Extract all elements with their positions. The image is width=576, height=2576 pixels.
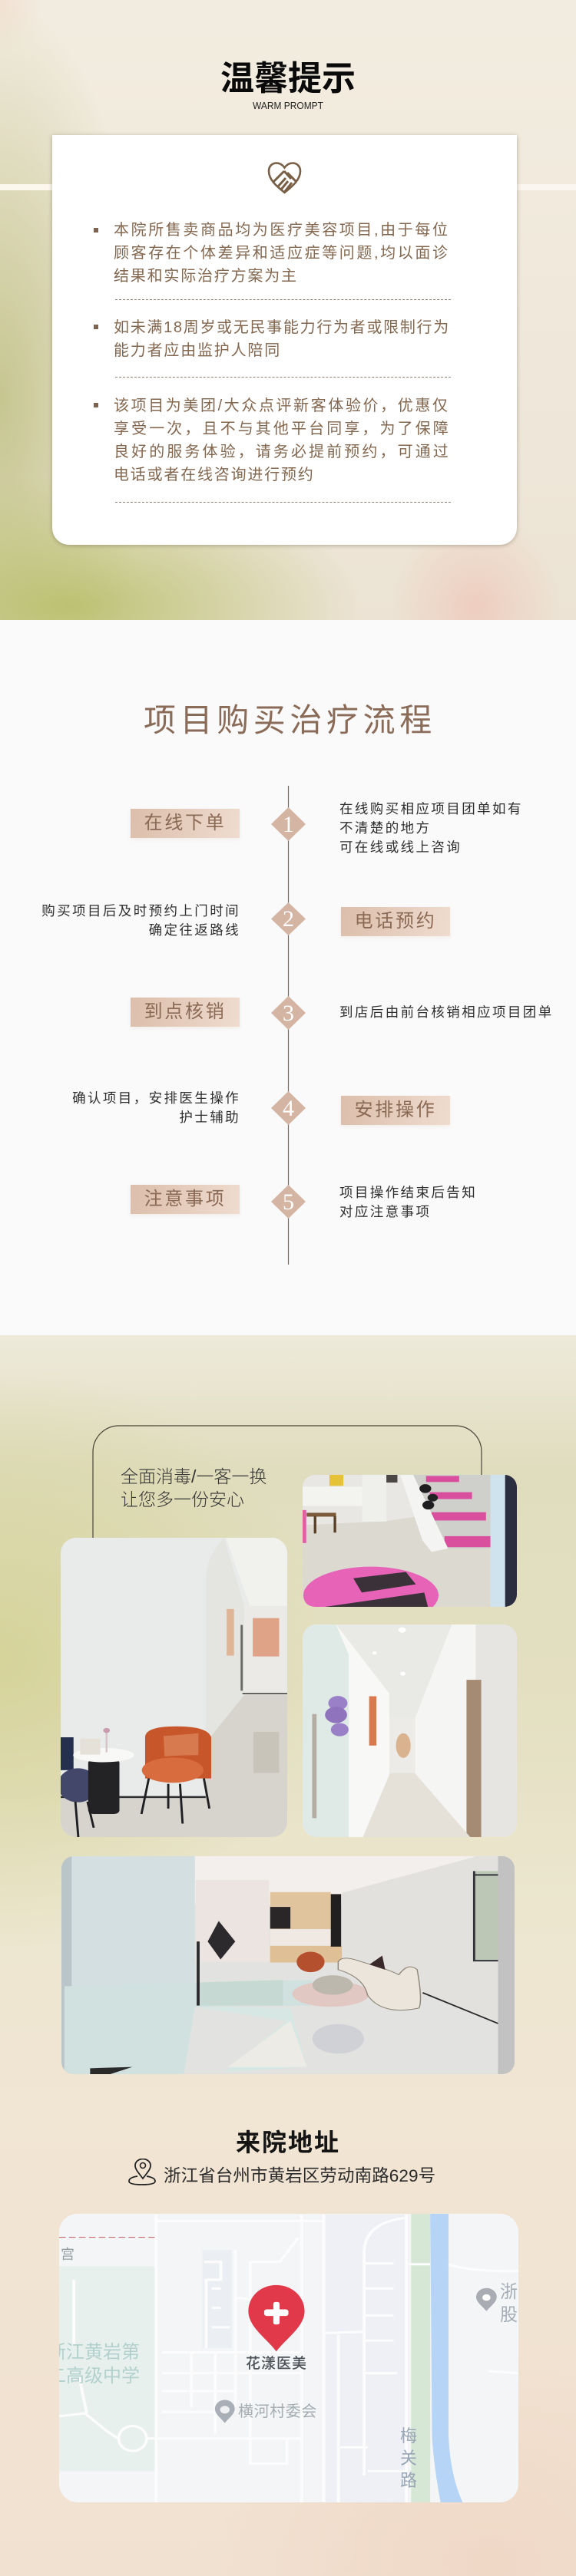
text lines: 该项目为美团/大众点评新客体验价，优惠仅 [114, 397, 450, 414]
heading: warm prompt [220, 60, 356, 111]
text lines: 电话或者在线咨询进行预约 [114, 467, 315, 483]
bullet [94, 325, 98, 329]
step 4 description: 护士辅助 [179, 1110, 240, 1125]
map label: right poi [500, 2281, 518, 2324]
map label: village committee: 横河村委会 [238, 2403, 317, 2420]
title: 温馨提示 [220, 60, 356, 97]
panel: warm prompt background [0, 0, 576, 620]
step 4 marker: 4 [283, 1096, 294, 1121]
text lines: 顾客存在个体差异和适应症等问题,均以面诊 [114, 245, 450, 262]
step 1 label [131, 809, 240, 838]
bullet [94, 403, 98, 407]
step 2 description: 确定往返路线 [149, 922, 240, 938]
hygiene caption [121, 1466, 266, 1509]
step 4 description [72, 1090, 240, 1125]
pin: village committee [215, 2400, 235, 2423]
text lines [114, 221, 450, 285]
text lines: 如未满18周岁或无民事能力行为者或限制行为 [114, 319, 450, 336]
text lines: 本院所售卖商品均为医疗美容项目,由于每位 [114, 222, 450, 239]
hygiene caption: 全面消毒/一客一换 [121, 1466, 266, 1486]
step 4 label [341, 1096, 450, 1125]
map label: palace: 宫 [61, 2247, 74, 2262]
map base [59, 2214, 497, 2502]
photo: corridor with orange chair [61, 1538, 287, 1837]
heading: hospital address: 来院地址 [236, 2129, 340, 2156]
step 5 marker [271, 1185, 306, 1219]
map label: road: 路 [400, 2471, 417, 2490]
panel: environment and address background [0, 1335, 576, 2576]
map label: road: 梅 [400, 2426, 417, 2446]
step 5 label [131, 1185, 240, 1214]
step 3 marker [271, 996, 306, 1030]
photo: lounge with sofa and glass stair rail [61, 1856, 515, 2074]
step 3 marker: 3 [283, 1001, 294, 1026]
step 1 description: 在线购买相应项目团单如有 [339, 801, 523, 816]
step 2 label: 电话预约 [355, 911, 436, 932]
map label: road: 关 [400, 2449, 417, 2468]
step 1 description: 不清楚的地方 [339, 820, 431, 836]
step 2 marker [271, 902, 306, 935]
step 1 description: 可在线或线上咨询 [339, 839, 462, 855]
tip 2 [94, 319, 450, 359]
subtitle: WARM PROMPT [253, 100, 323, 111]
text lines [114, 319, 450, 359]
rounded outline frame [92, 1425, 482, 1538]
text lines: 能力者应由监护人陪同 [114, 342, 281, 359]
text lines: 结果和实际治疗方案为主 [114, 268, 298, 285]
map label: road [400, 2426, 417, 2490]
step 5 label: 注意事项 [144, 1189, 226, 1209]
map label: school [59, 2342, 140, 2386]
photo: staircase and pink floor sign [303, 1475, 517, 1607]
step 4 marker [271, 1091, 306, 1125]
map label: clinic: 花漾医美 [246, 2356, 307, 2372]
address text: 浙江省台州市黄岩区劳动南路629号 [164, 2166, 435, 2185]
tip 1 [94, 221, 450, 285]
heading: process title: 项目购买治疗流程 [144, 702, 436, 738]
pin: red clinic marker [248, 2285, 305, 2351]
panel: process background [0, 620, 576, 1335]
step 2 description: 购买项目后及时预约上门时间 [41, 903, 240, 919]
step 1 marker [271, 807, 306, 841]
icon: heart with handshake [267, 162, 301, 193]
hygiene caption: 让您多一份安心 [121, 1489, 244, 1509]
step 4 description: 确认项目，安排医生操作 [72, 1090, 240, 1106]
bullet [94, 228, 98, 233]
step 5 description: 项目操作结束后告知 [339, 1185, 477, 1200]
map panel [59, 2214, 518, 2502]
pin: grey poi [476, 2288, 497, 2311]
text lines: 享受一次，且不与其他平台同享，为了保障 [114, 421, 451, 437]
step 2 label [341, 907, 450, 936]
light band right [517, 184, 576, 190]
step 2 marker: 2 [283, 906, 294, 932]
step 2 description [41, 903, 240, 938]
step 1 marker: 1 [283, 812, 294, 837]
step 5 marker: 5 [283, 1189, 294, 1215]
timeline with numbered diamonds [271, 786, 306, 1265]
step 5 description [339, 1185, 477, 1219]
light band left [0, 184, 54, 190]
text lines [114, 397, 451, 483]
step 5 description: 对应注意事项 [339, 1204, 431, 1219]
step 3 description: 到店后由前台核销相应项目团单 [339, 1004, 554, 1020]
panel: tips card [52, 135, 517, 545]
step 4 label: 安排操作 [355, 1100, 436, 1120]
step 3 label [131, 998, 240, 1027]
icon: location pin [128, 2159, 156, 2185]
tip 3 [94, 397, 451, 483]
step 1 description [339, 801, 523, 855]
text lines: 良好的服务体验，请务必提前预约，可通过 [114, 444, 451, 460]
step 3 label: 到点核销 [144, 1001, 226, 1022]
step 1 label: 在线下单 [144, 813, 226, 833]
photo: white hallway with purple balloons [303, 1624, 517, 1837]
